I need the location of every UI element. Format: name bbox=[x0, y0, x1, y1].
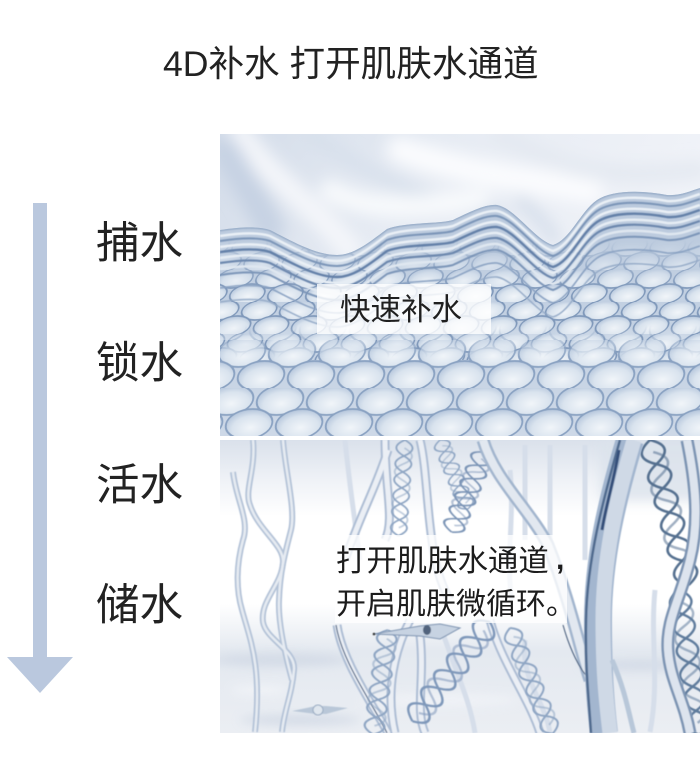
label: 储水: 储水 bbox=[96, 582, 183, 630]
cell: neuron bbox=[373, 624, 460, 639]
callout: 打开肌肤水通道,开启肌肤微循环。: , bbox=[556, 543, 564, 576]
large tubes right bbox=[483, 440, 696, 733]
central tubes bbox=[336, 440, 540, 733]
label box: 快速补水 bbox=[317, 284, 491, 334]
title: 4D补水 打开肌肤水通道 bbox=[163, 44, 539, 84]
image panel: water-mesh membrane bbox=[220, 134, 700, 436]
label: 捕水: 捕水 bbox=[96, 220, 183, 268]
callout: 打开肌肤水通道,开启肌肤微循环。: 打开肌肤水通道 bbox=[336, 544, 549, 578]
faint background tubes bbox=[345, 440, 655, 733]
image panel: water channels and capillaries bbox=[220, 440, 700, 733]
mesh structure bbox=[220, 180, 700, 436]
background haze bbox=[210, 440, 700, 733]
left wavy tubes bbox=[233, 440, 294, 732]
label: 锁水: 锁水 bbox=[96, 340, 183, 388]
callout: 打开肌肤水通道,开启肌肤微循环。: 开启肌肤微循环。 bbox=[336, 588, 576, 621]
fabric surface bbox=[220, 134, 700, 436]
cell: small bbox=[292, 705, 348, 715]
helix strands bbox=[363, 437, 700, 737]
label box: 快速补水: 快速补水 bbox=[340, 293, 462, 327]
label: 活水: 活水 bbox=[96, 462, 183, 510]
callout: 打开肌肤水通道,开启肌肤微循环。 bbox=[335, 535, 576, 623]
arrow: downward process flow bbox=[7, 203, 73, 693]
